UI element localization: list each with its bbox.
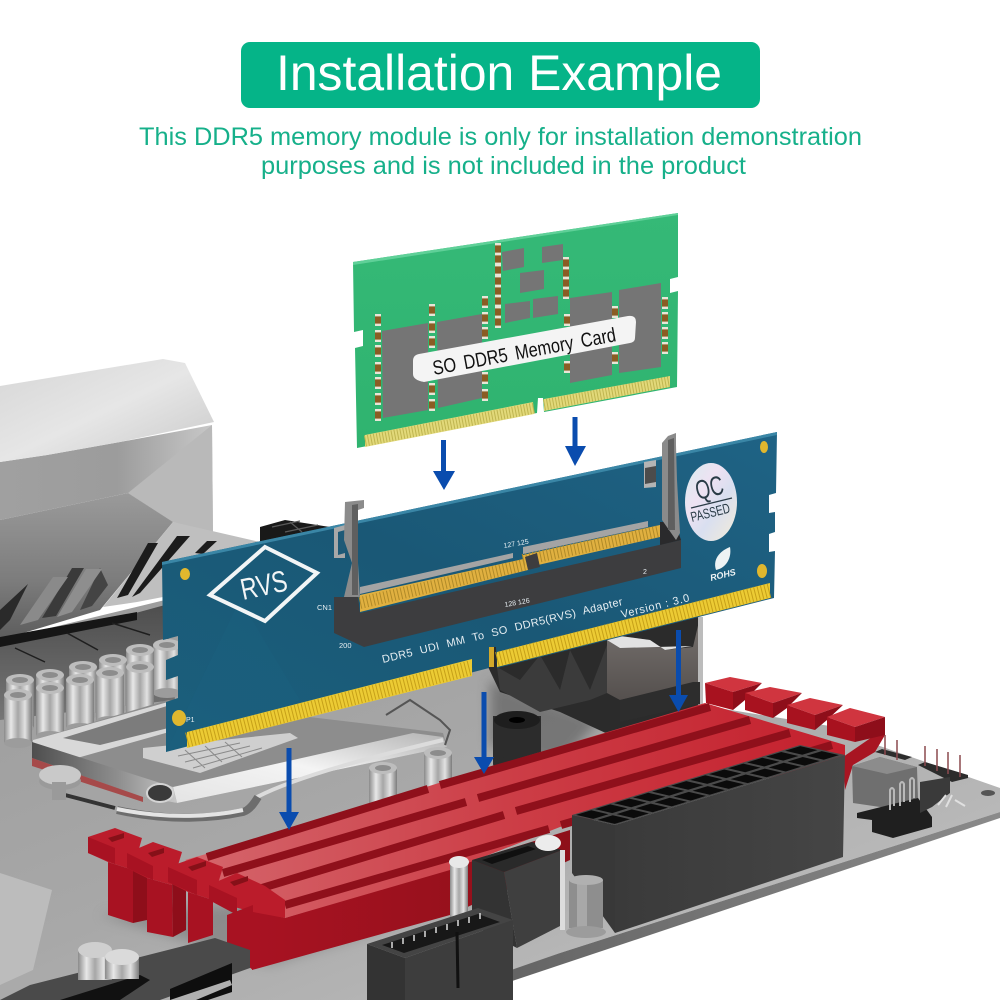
arrow: adapter left <box>279 748 299 830</box>
adapter silkscreen text: CN1 <box>317 603 332 612</box>
adapter silkscreen text: 200 <box>339 641 352 650</box>
memory module <box>353 213 678 448</box>
CPU cooler heatsink <box>0 359 260 640</box>
adapter silkscreen text: Version : 3.0 <box>620 592 691 621</box>
module gold fingers <box>365 376 670 447</box>
RoHS leaf mark: ROHS <box>709 567 737 583</box>
motherboard surface <box>0 600 1000 1000</box>
adapter silkscreen text: 127 125 <box>503 539 529 550</box>
adapter silkscreen text: 2 <box>643 569 647 576</box>
QC passed sticker: PASSED <box>689 500 732 525</box>
electrolytic capacitor <box>566 875 606 938</box>
lower-left black port <box>0 938 250 1000</box>
socket lever <box>39 765 258 818</box>
lower-left capacitors <box>78 942 139 980</box>
adapter silkscreen text: P1 <box>186 717 195 724</box>
arrow: module left <box>433 440 455 490</box>
adapter silkscreen text: 128 126 <box>504 598 530 609</box>
small capacitors on board <box>369 747 452 821</box>
QC passed sticker <box>685 463 737 541</box>
RoHS leaf mark <box>709 547 737 583</box>
red memory slots <box>185 703 885 970</box>
subtitle text <box>139 123 862 180</box>
module label: SO DDR5 Memory Card <box>431 324 618 380</box>
retention latches <box>334 433 680 597</box>
QC passed sticker: QC <box>692 470 727 506</box>
right fan headers <box>852 735 995 838</box>
rear heatsink block <box>480 617 703 765</box>
adapter gold fingers <box>187 583 770 748</box>
left slot clips <box>88 828 285 970</box>
IDC pin header <box>367 908 513 1000</box>
24-pin power connector <box>572 745 845 933</box>
RVS logo <box>210 547 317 621</box>
inductor row <box>0 605 175 720</box>
subtitle text: This DDR5 memory module is only for installation demonstration <box>139 123 862 151</box>
arrow: module right <box>565 417 586 466</box>
adapter board <box>162 432 777 752</box>
adapter silkscreen text <box>186 539 691 724</box>
arrow: adapter right <box>669 630 688 712</box>
DIMM slot housing <box>334 521 681 647</box>
adapter silkscreen text: DDR5 UDI MM To SO DDR5(RVS) Adapter <box>381 596 624 666</box>
module memory chips <box>382 244 661 418</box>
adapter mounting holes <box>172 441 768 726</box>
CPU socket frame <box>32 700 450 803</box>
capacitors behind adapter <box>4 639 181 748</box>
arrow: adapter center <box>474 692 494 774</box>
heading banner: Installation Example <box>276 45 722 101</box>
RVS logo: RVS <box>238 565 290 607</box>
rear power connector <box>260 520 330 548</box>
standoff post <box>493 711 541 772</box>
right slot clips <box>705 677 885 742</box>
module small components <box>375 243 668 421</box>
subtitle text: purposes and is not included in the product <box>261 152 746 180</box>
SATA connector <box>449 835 565 948</box>
shadow under memory slots <box>100 860 570 965</box>
